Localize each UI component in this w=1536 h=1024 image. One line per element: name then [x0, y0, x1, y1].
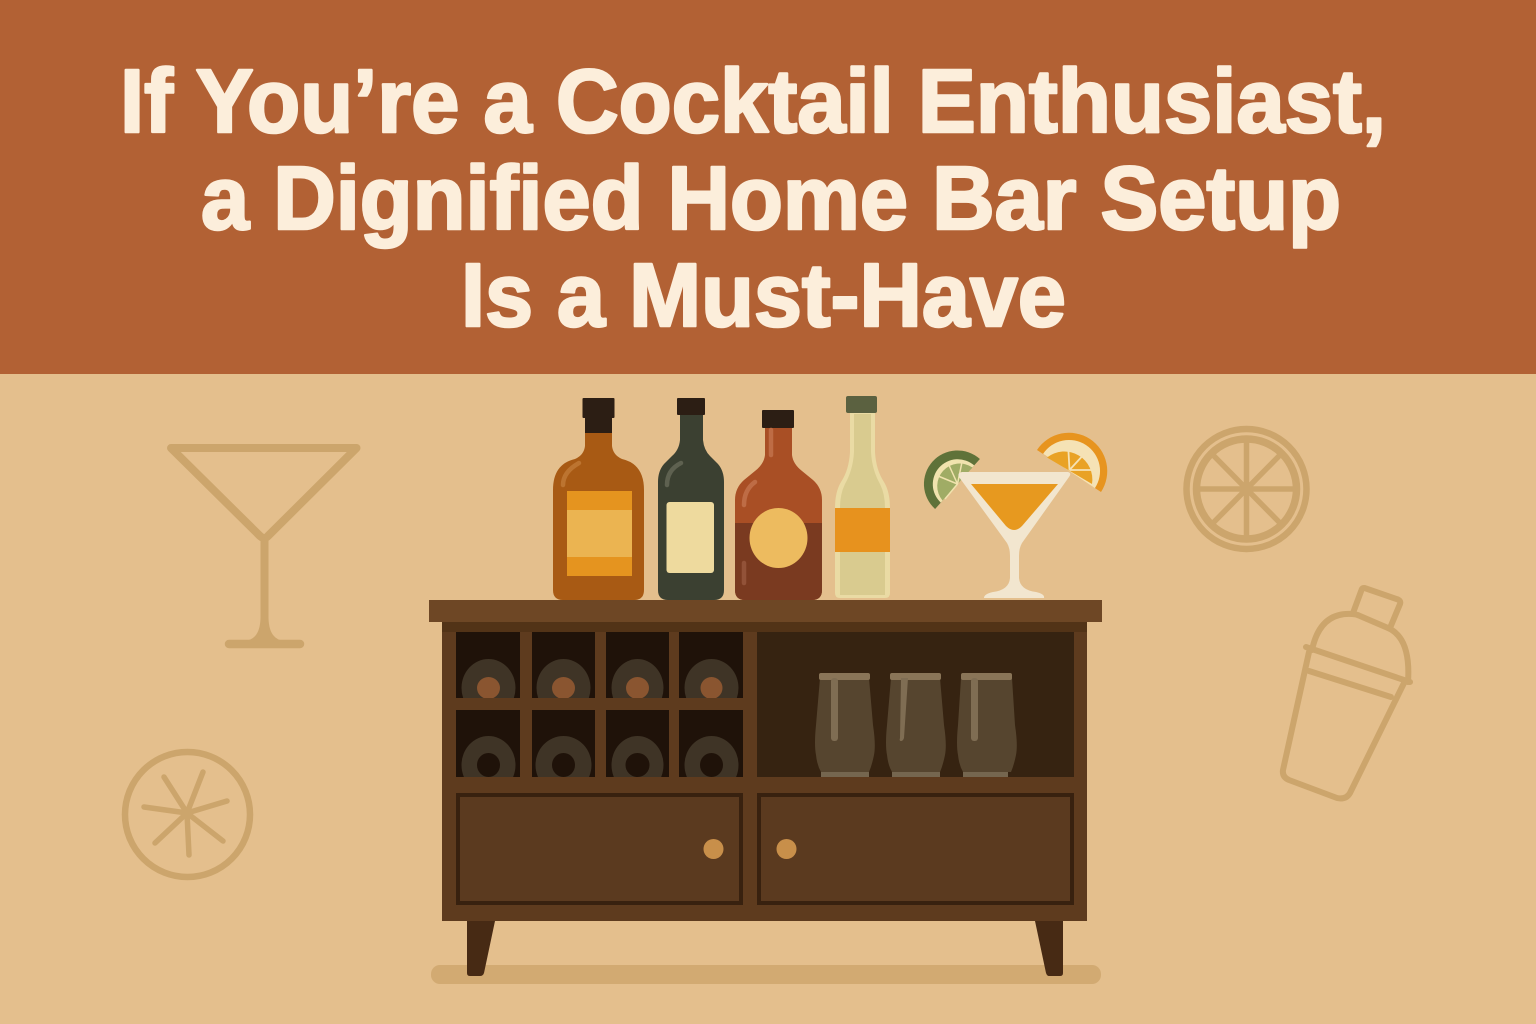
- wine rack: [456, 632, 743, 777]
- icon: lime wheel outline: [125, 752, 250, 877]
- header banner: [0, 0, 1536, 374]
- cabinet body: [442, 622, 1087, 921]
- icon: citrus wheel outline: [1186, 429, 1306, 549]
- martini glass with drink: [958, 472, 1070, 598]
- bottle: dark green wine: [658, 398, 724, 600]
- glass 1: [815, 673, 875, 777]
- cabinet top: [429, 600, 1102, 622]
- title: Is a Must-Have: [461, 246, 1066, 346]
- title: [120, 52, 1386, 346]
- cabinet legs: [467, 921, 1063, 976]
- icon: lime slice garnish: [924, 450, 980, 509]
- icon: orange slice garnish: [1037, 433, 1107, 492]
- table shadow: [431, 965, 1101, 984]
- glass 2: [886, 673, 946, 777]
- title: If You’re a Cocktail Enthusiast,: [120, 52, 1386, 152]
- background panel: [0, 374, 1536, 1024]
- cabinet door: right: [759, 795, 1072, 903]
- glass shelf: [757, 632, 1074, 777]
- glass 3: [957, 673, 1017, 777]
- bottle: red-brown liqueur: [735, 410, 822, 600]
- title: a Dignified Home Bar Setup: [201, 149, 1341, 249]
- bottle: pale gin: [835, 396, 890, 598]
- icon: martini glass outline: [171, 448, 356, 644]
- bottle: amber whiskey: [553, 398, 644, 600]
- cabinet door: left: [458, 795, 741, 903]
- icon: cocktail shaker outline: [1283, 588, 1410, 798]
